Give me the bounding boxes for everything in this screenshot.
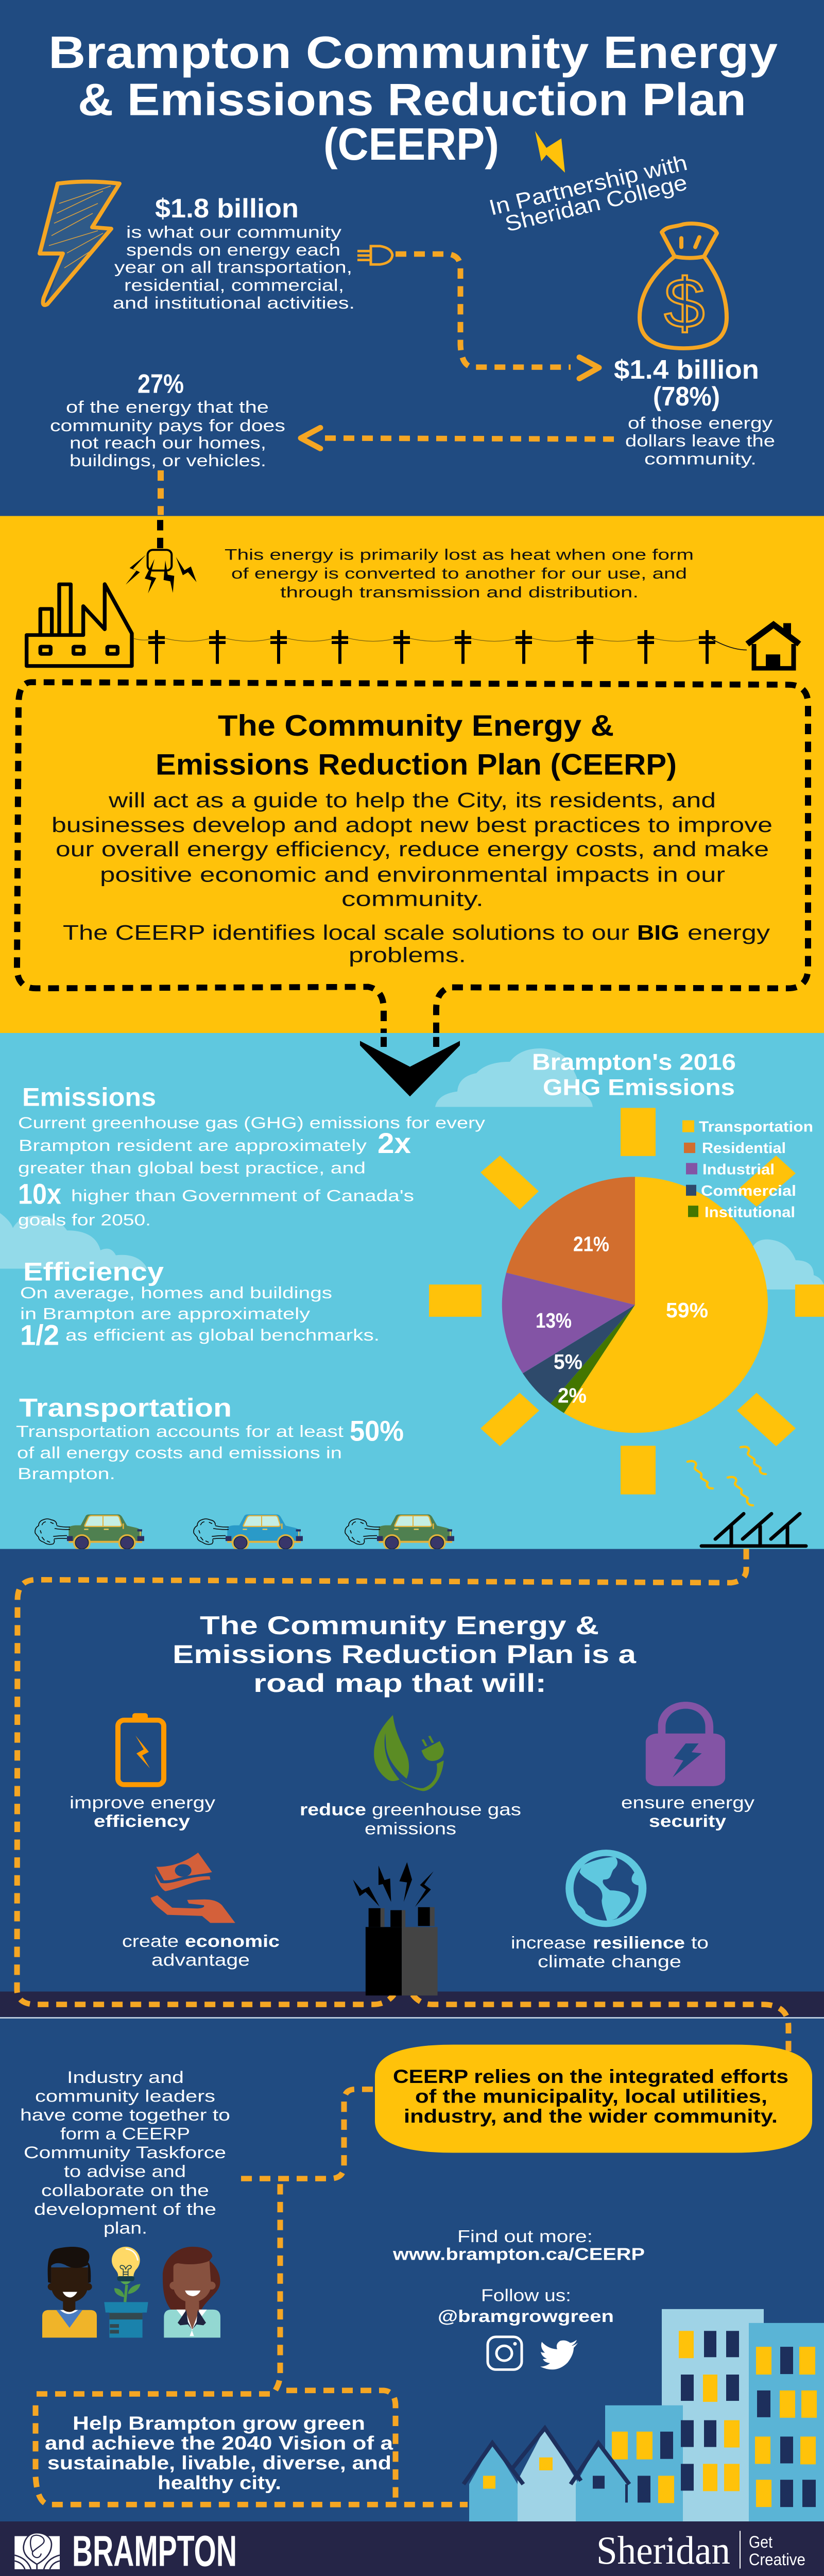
stat: $1.8 billion: residential, commercial,	[124, 276, 344, 295]
text: help Brampton grow green: sustainable, livable, diverse, and	[47, 2452, 391, 2473]
stat: $1.8 billion: and institutional activities.	[113, 294, 355, 313]
text: energy lost as heat: of energy is converted to another for our use, and	[231, 565, 687, 582]
stat: $1.4 billion: of those energy	[628, 414, 772, 433]
text: increase resilience to climate change	[511, 1933, 709, 1971]
slice: transportation 59%	[564, 1177, 768, 1433]
slice: industrial 13%	[502, 1273, 635, 1374]
text: Transportation: Brampton.	[18, 1464, 115, 1483]
arrow: dotted path to $1.4 billion	[396, 254, 599, 379]
text: Emissions: greater than global best practice, and	[18, 1159, 366, 1177]
text: CEERP description: The CEERP identifies local scale solutions to our	[63, 921, 629, 944]
text: CEERP description: businesses develop and adopt new best practices to improve	[52, 814, 772, 837]
text: create economic advantage: create	[122, 1931, 179, 1951]
clouds	[0, 1048, 824, 1290]
text: community taskforce: development of the	[34, 2200, 216, 2219]
text: help Brampton grow green: healthy city.	[158, 2472, 281, 2493]
stat: $1.4 billion: (78%)	[653, 382, 720, 412]
icon: instagram	[488, 2337, 522, 2369]
heading: Brampton's 2016 GHG Emissions	[532, 1049, 736, 1100]
icon: money bag	[640, 224, 727, 348]
stat: $1.4 billion	[614, 355, 775, 468]
text: energy lost as heat: through transmission and distribution.	[280, 584, 639, 601]
heading: The Community Energy & Emissions Reduction Plan (CEERP): Emissions Reduction Plan (CEERP)	[156, 748, 677, 781]
windows	[612, 2331, 817, 2507]
icon: heat squiggles	[688, 1447, 766, 1505]
heading: Brampton's 2016 GHG Emissions: Brampton's 2016	[532, 1049, 736, 1075]
logo: Sheridan Get Creative: Sheridan	[596, 2528, 730, 2572]
partnership note: Sheridan College	[503, 171, 690, 236]
icon: green car	[35, 1514, 144, 1550]
text: CEERP description: energy	[688, 921, 770, 944]
text: create economic advantage: advantage	[151, 1951, 250, 1970]
slice: institutional 2%	[551, 1305, 635, 1413]
arrow: black chevron	[360, 1041, 460, 1096]
text: Transportation: of all energy costs and emissions in	[17, 1444, 342, 1462]
text: follow us: @bramgrowgreen	[438, 2307, 614, 2326]
text: Transportation	[16, 1393, 404, 1483]
dotted connector to bulb	[158, 470, 164, 515]
icon: money and hand	[151, 1853, 235, 1923]
stat: $1.8 billion: spends on energy each	[126, 241, 340, 260]
building: right	[749, 2323, 824, 2521]
text: community taskforce	[20, 2068, 230, 2238]
houses	[464, 2428, 629, 2521]
legend: Residential	[702, 1140, 786, 1157]
pie labels	[536, 1232, 708, 1407]
text: reduce greenhouse gas emissions: reduce	[300, 1800, 366, 1820]
text: reduce greenhouse gas emissions	[300, 1800, 521, 1838]
pie labels: 13%	[536, 1309, 572, 1332]
text: Efficiency: Efficiency	[23, 1257, 164, 1286]
text: improve energy efficiency: improve energy	[70, 1793, 216, 1812]
text: ensure energy security: ensure energy	[621, 1793, 755, 1812]
footer band	[0, 2521, 824, 2576]
text: community taskforce: Industry and	[67, 2068, 184, 2087]
icon: money bag: $	[664, 264, 705, 343]
text: reduce greenhouse gas emissions: emissions	[365, 1819, 456, 1838]
text: CEERP description: BIG	[637, 921, 679, 944]
slice: commercial 5%	[523, 1305, 635, 1403]
pie chart: 2016 GHG emissions	[502, 1177, 768, 1433]
panel: emissions background	[0, 1033, 824, 1549]
heading: road map: road map that will:	[253, 1669, 546, 1698]
heading: The Community Energy & Emissions Reduction Plan (CEERP): The Community Energy &	[218, 709, 614, 742]
icon: green car	[345, 1514, 454, 1550]
text: community taskforce: have come together to	[20, 2106, 230, 2125]
icon: battery	[118, 1713, 164, 1785]
logo: Brampton rose	[14, 2533, 60, 2569]
dashed continuation into arrow	[384, 1037, 436, 1047]
legend: Industrial	[702, 1161, 775, 1178]
slice: residential 21%	[506, 1177, 635, 1305]
heading: Brampton's 2016 GHG Emissions: GHG Emissions	[543, 1074, 735, 1100]
text: find out more: Find out more:	[457, 2227, 593, 2246]
icon: leaf with plug	[374, 1715, 444, 1791]
pie labels: 59%	[666, 1299, 708, 1322]
icon: house	[747, 623, 799, 669]
icon: solar panels	[701, 1514, 806, 1546]
icon: people and idea plant	[42, 2247, 220, 2337]
icon: lock	[646, 1702, 725, 1786]
stat: $1.8 billion: is what our community	[126, 223, 341, 242]
text: ensure energy security: security	[649, 1811, 726, 1831]
text: create economic advantage: economic	[185, 1931, 280, 1951]
dashed speech box	[17, 682, 808, 1033]
text: Efficiency: On average, homes and buildings	[20, 1284, 332, 1302]
text: create economic advantage	[122, 1931, 280, 1970]
text: increase resilience to climate change: resilience	[593, 1933, 685, 1953]
text: CEERP description: will act as a guide to help the City, its residents, and	[108, 789, 716, 812]
partnership note: In Partnership with	[487, 150, 690, 220]
person: woman	[163, 2247, 220, 2337]
text: find out more: www.brampton.ca/CEERP	[392, 2245, 645, 2264]
text: increase resilience to climate change: to	[691, 1933, 709, 1953]
text: help Brampton grow green: Help Brampton grow green	[73, 2413, 365, 2434]
text: Emissions: Emissions	[22, 1082, 156, 1111]
text: improve energy efficiency	[70, 1793, 216, 1831]
title: Brampton Community Energy	[48, 27, 778, 78]
stat: $1.8 billion: $1.8 billion	[155, 194, 299, 224]
text: Emissions	[18, 1082, 486, 1229]
text: CEERP description: positive economic and environmental impacts in our	[100, 863, 725, 886]
icon: power line poles	[134, 630, 747, 664]
callout: CEERP relies: of the municipality, local utilities,	[415, 2086, 767, 2107]
text: Emissions: Brampton resident are approximately	[19, 1137, 367, 1155]
legend	[682, 1118, 813, 1221]
pie labels: 21%	[573, 1232, 609, 1256]
icon: globe	[565, 1850, 646, 1927]
text: community taskforce: form a CEERP	[60, 2125, 190, 2143]
text: community taskforce: community leaders	[35, 2087, 215, 2106]
stat: $1.8 billion: year on all transportation,	[114, 258, 352, 277]
panel: intro background	[0, 0, 824, 516]
legend: Transportation	[699, 1118, 813, 1136]
stat: $1.4 billion: $1.4 billion	[614, 355, 759, 385]
icon: sparking factory	[353, 1862, 438, 1995]
text: follow us	[438, 2286, 614, 2326]
text: CEERP description: our overall energy efficiency, reduce energy costs, and make	[56, 838, 769, 861]
icon: hatched lightning bolt	[40, 181, 119, 305]
icon: twitter	[540, 2340, 578, 2369]
text: increase resilience to climate change: increase	[511, 1933, 586, 1953]
panel: road map background	[0, 1549, 824, 2521]
stat: $1.4 billion: community.	[644, 450, 757, 468]
icon: blue car	[194, 1514, 303, 1550]
legend: Commercial	[701, 1182, 796, 1199]
heading: road map	[173, 1611, 637, 1698]
text: Emissions: 10x	[18, 1178, 61, 1210]
building: lower	[605, 2405, 683, 2521]
text: Efficiency: 1/2	[20, 1319, 59, 1352]
stat: 27%: 27%	[138, 369, 184, 399]
stat: $1.4 billion: dollars leave the	[625, 432, 775, 451]
stat: $1.8 billion	[113, 194, 355, 313]
stat: 27%: community pays for does	[50, 416, 285, 435]
text: community taskforce: Community Taskforce	[24, 2144, 226, 2162]
logo: Sheridan Get Creative: Creative	[749, 2550, 805, 2569]
callout: CEERP relies	[375, 2045, 812, 2153]
plant with light bulb	[104, 2247, 148, 2337]
text: Emissions: goals for 2050.	[18, 1211, 151, 1229]
stat: 27%: of the energy that the	[66, 398, 269, 417]
text: Efficiency: as efficient as global benchmarks.	[65, 1326, 380, 1344]
text: help Brampton grow green: and achieve the 2040 Vision of a	[45, 2432, 393, 2453]
text: CEERP description: problems.	[349, 943, 466, 967]
logo: BRAMPTON wordmark: BRAMPTON	[72, 2527, 237, 2575]
stat: 27%: buildings, or vehicles.	[70, 452, 266, 470]
icon: factory and sparking bulb	[27, 550, 197, 666]
icon: plug	[357, 246, 392, 264]
icon: small lightning bolt	[535, 131, 565, 173]
icon: sun rays	[429, 1108, 824, 1495]
text: community taskforce: to advise and	[64, 2162, 186, 2181]
pie labels: 5%	[554, 1350, 582, 1374]
dotted road path	[17, 1549, 788, 2052]
text: Transportation: 50%	[350, 1415, 404, 1447]
dark road band	[0, 1992, 824, 2017]
text: ensure energy security	[621, 1793, 755, 1831]
text: Emissions: higher than Government of Canada's	[71, 1187, 414, 1205]
logo: Sheridan Get Creative: Get	[749, 2533, 773, 2552]
text: community taskforce: collaborate on the	[41, 2181, 209, 2200]
heading: The Community Energy & Emissions Reduction Plan (CEERP)	[156, 709, 677, 781]
dotted path: taskforce to help box	[34, 2089, 468, 2504]
stat: 27%	[50, 369, 285, 470]
icon: city buildings	[464, 2309, 824, 2521]
title: & Emissions Reduction Plan	[78, 74, 746, 125]
title: (CEERP)	[323, 119, 499, 170]
text: increase resilience to climate change: climate change	[538, 1952, 681, 1971]
heading: road map: The Community Energy &	[200, 1611, 599, 1640]
callout: CEERP relies: CEERP relies on the integrated efforts	[393, 2065, 788, 2087]
text: find out more	[392, 2227, 645, 2264]
text: energy lost as heat	[225, 546, 694, 601]
text: improve energy efficiency: efficiency	[94, 1811, 190, 1831]
text: Emissions: Current greenhouse gas (GHG) emissions for every	[18, 1113, 486, 1132]
text: energy lost as heat: This energy is primarily lost as heat when one form	[225, 546, 694, 563]
text: CEERP description: community.	[341, 887, 484, 910]
text: CEERP description	[52, 789, 772, 967]
heading: road map: Emissions Reduction Plan is a	[173, 1640, 637, 1669]
white rule	[0, 2018, 824, 2019]
text: Efficiency	[20, 1257, 380, 1352]
pie labels: 2%	[558, 1384, 587, 1407]
text: community taskforce: plan.	[104, 2219, 147, 2238]
arrow: dotted path to 27%	[301, 428, 614, 449]
text: reduce greenhouse gas emissions: greenhouse gas	[372, 1800, 521, 1820]
person: man	[42, 2247, 97, 2337]
stat: 27%: not reach our homes,	[70, 434, 266, 452]
text: Transportation: Transportation	[19, 1393, 232, 1422]
callout: CEERP relies: industry, and the wider community.	[404, 2105, 778, 2127]
building: tall light	[662, 2309, 764, 2521]
text: Efficiency: in Brampton are approximately	[20, 1304, 311, 1323]
legend: Institutional	[705, 1204, 795, 1221]
text: follow us: Follow us:	[481, 2286, 571, 2305]
title	[48, 27, 778, 170]
text: Transportation: Transportation accounts for at least	[16, 1422, 344, 1440]
panel: energy loss background	[0, 516, 824, 1033]
text: Emissions: 2x	[377, 1127, 411, 1160]
text: help Brampton grow green	[45, 2413, 393, 2493]
